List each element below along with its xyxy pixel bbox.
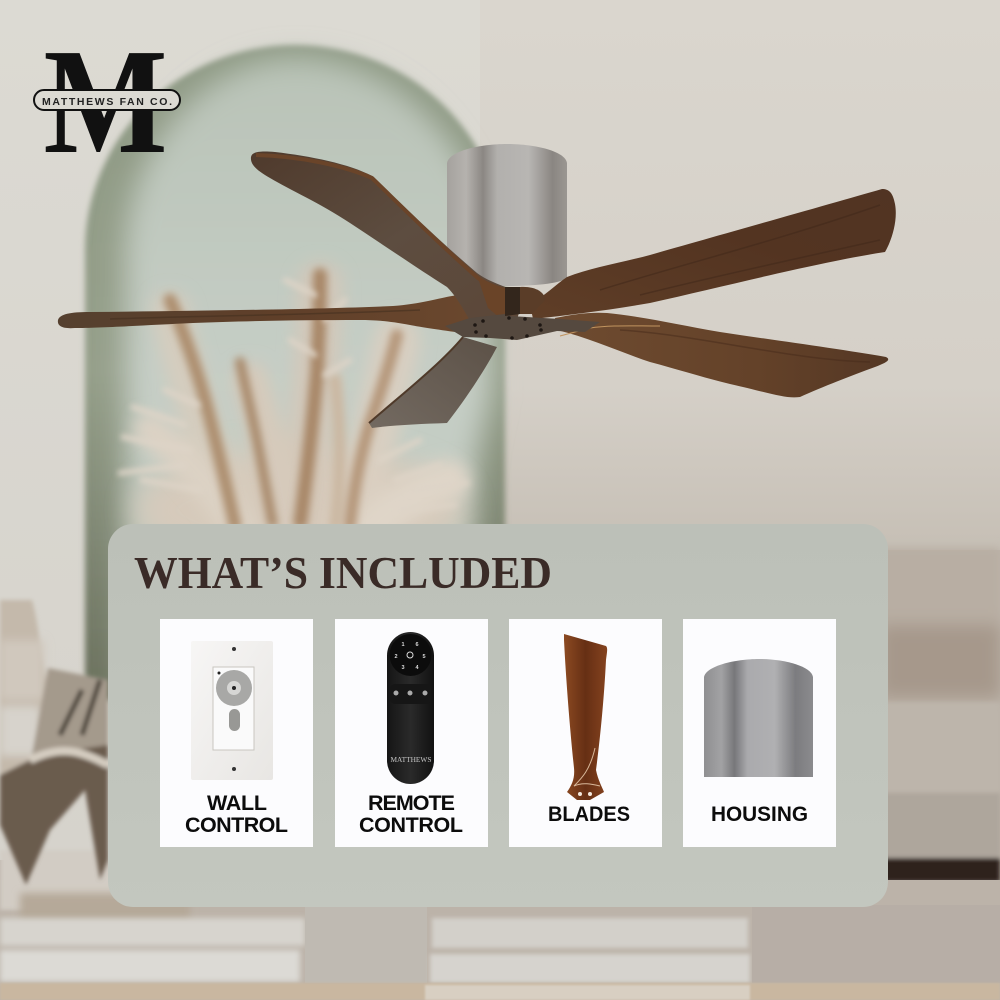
card: remote control [335,619,488,847]
background: floor [0,850,1000,1000]
background: sofa on right [860,548,1000,882]
fan: left blade [58,295,490,335]
label: HOUSING [711,803,808,826]
icon: metal housing [704,659,813,777]
label: WALL [207,791,267,815]
icon: black remote: 2 [394,654,398,660]
icon: black remote: 5 [422,654,426,660]
icon: wall control plate [191,641,273,780]
background: chair and throw blanket [0,600,108,885]
logo: Matthews Fan Co.: MATTHEWS FAN CO. [42,96,172,108]
card: wall control [160,619,313,847]
label: BLADES [548,803,630,826]
fan: ceiling fan with five wood blades [58,144,896,428]
fan: lower front blade [369,337,497,428]
fan: metal housing [447,144,567,286]
icon: black remote: MATTHEWS [390,756,432,764]
icon: black remote [387,632,434,784]
heading: WHAT’S INCLUDED [134,547,552,598]
card: housing [683,619,836,847]
icon: black remote: 1 [401,642,405,648]
fan: upper left blade [251,152,525,335]
label: CONTROL [185,813,288,837]
fan: hub [445,314,600,340]
panel: what's included [108,524,888,907]
icon: wood blade [564,634,607,800]
fan: lower right blade [555,313,888,397]
logo: Matthews Fan Co.: M [44,17,168,185]
label: CONTROL [359,813,463,837]
icon: black remote: 3 [401,665,405,671]
background: pampas grass [120,275,467,572]
fan: upper right blade [530,189,896,319]
background: green arched niche [85,45,505,700]
card: blades [509,619,662,847]
icon: black remote: 6 [415,642,419,648]
label: REMOTE [368,791,455,815]
icon: black remote: 4 [415,665,419,671]
